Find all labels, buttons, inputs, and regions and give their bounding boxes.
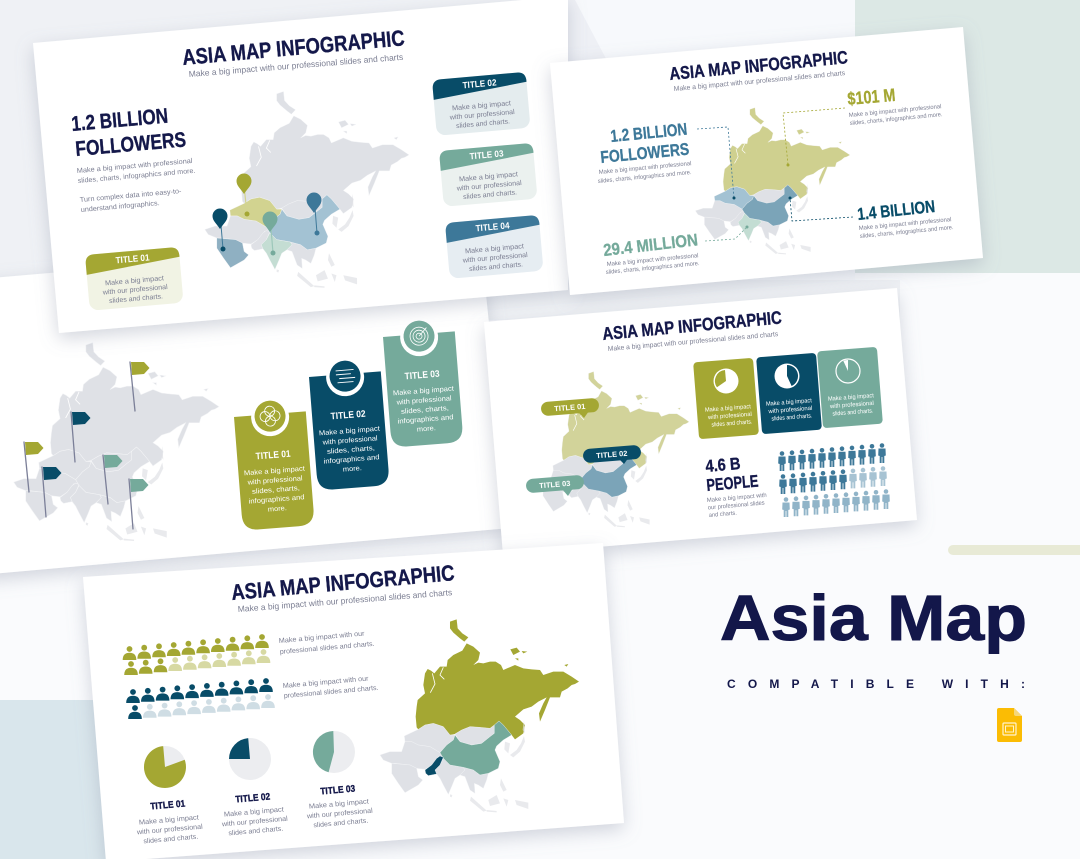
card: title 02 [432, 72, 531, 136]
body text: Make a big impact with professional [77, 158, 193, 175]
box: green pie [817, 347, 883, 428]
panel: slide 5 pictograms and pies [83, 543, 624, 859]
stat: 1.4 billion [856, 197, 954, 240]
slide 4 subtitle: Make a big impact with our professional slides and charts [608, 331, 779, 353]
box: olive pie: slides and charts. [711, 419, 753, 429]
box: olive pie: Make a big impact [705, 404, 751, 414]
card: title 03: with professional [395, 395, 452, 407]
pie: title 03: slides and charts. [313, 818, 369, 829]
card: title 02: more. [343, 465, 362, 474]
stat: $101 M: $101 M [847, 85, 896, 109]
body text: understand infographics. [81, 200, 160, 214]
pie: title 01: slides and charts. [143, 834, 199, 845]
slide 4 title: ASIA MAP INFOGRAPHIC [602, 307, 783, 344]
stat: 1.2 billion followers [598, 120, 692, 185]
headline: 1.2 billion followers [70, 105, 187, 161]
slide 5 subtitle: Make a big impact with our professional slides and charts [237, 587, 452, 614]
pie: title 01: with our professional [136, 824, 204, 836]
card: title 03: slides and charts. [463, 189, 517, 201]
card: title 01: Make a big impact [244, 466, 305, 477]
card: title 03: TITLE 03 [469, 148, 504, 161]
stat: 4.6 B people: 4.6 B [705, 454, 741, 476]
stat: 4.6 B people: and charts. [709, 511, 737, 519]
pie: title 03: Make a big impact [309, 798, 369, 811]
body text: slides, charts, infographics and more. [78, 168, 196, 185]
main title: Asia Map [720, 582, 1027, 654]
box: green pie: slides and charts. [832, 408, 874, 418]
callout: title 03 [526, 475, 584, 496]
card: title 03: infographics and [397, 414, 454, 426]
card: title 02: with professional [321, 435, 378, 447]
pie: title 02: slides and charts. [228, 826, 284, 837]
card: title 01: infographics and [248, 494, 305, 506]
stat: $101 M: Make a big impact with professional [849, 104, 942, 119]
map pins [212, 174, 322, 256]
card: title 02 [308, 355, 390, 491]
slide 2 title: ASIA MAP INFOGRAPHIC [668, 47, 849, 84]
icon: Google Slides file [997, 708, 1022, 742]
card: title 03: with our professional [456, 180, 522, 193]
slide 2 subtitle: Make a big impact with our professional slides and charts [674, 70, 846, 93]
card: title 01: TITLE 01 [115, 252, 150, 265]
card: title 02: slides and charts. [456, 118, 510, 130]
people rows olive [123, 634, 270, 675]
stat: 1.2 billion followers: 1.2 BILLION [610, 120, 688, 146]
panel: slide 4 pie boxes and people [484, 288, 917, 555]
pie: title 01 [136, 746, 204, 845]
card: title 02: Make a big impact [319, 426, 380, 437]
stat: 1.2 billion followers: Make a big impact with professional [599, 161, 692, 176]
slide 1 subtitle: Make a big impact with our professional slides and charts [188, 52, 403, 79]
callout: title 03: TITLE 03 [539, 479, 571, 490]
body text [77, 158, 196, 214]
card: title 01: with our professional [102, 284, 168, 297]
box: olive pie: with professional [707, 412, 752, 421]
box: dark pie: slides and charts. [771, 413, 813, 423]
pie: title 03: TITLE 03 [320, 784, 356, 798]
map: Russia and China highlighted [534, 372, 689, 527]
card: title 03 [439, 143, 538, 207]
box: green pie: with professional [829, 401, 874, 410]
card: title 02: with our professional [449, 109, 515, 122]
pie: title 02 [221, 738, 289, 837]
stat: 1.2 billion followers: slides, charts, infographics and more. [598, 170, 692, 185]
map: gray Asia with flags [14, 343, 219, 541]
panel: slide 2 statistics map [550, 27, 983, 295]
card: title 03: Make a big impact [393, 386, 454, 397]
card: title 01: Make a big impact [105, 275, 164, 287]
headline: 1.2 billion followers: FOLLOWERS [74, 128, 187, 161]
stat: 29.4 million: slides, charts, infographics and more. [606, 261, 700, 276]
card: title 01 [85, 247, 184, 311]
stat: 1.4 billion: 1.4 BILLION [856, 197, 936, 224]
stat: $101 M [847, 85, 943, 127]
subtitle: compatible with: COMPATIBLE WITH: [727, 677, 1025, 691]
pie: title 01: TITLE 01 [150, 798, 186, 813]
card: title 03: TITLE 03 [404, 369, 440, 382]
callout: title 02: TITLE 02 [596, 449, 628, 460]
callout: title 02 [583, 445, 641, 464]
stat: 4.6 B people: our professional slides [708, 501, 765, 511]
box: olive pie [693, 358, 759, 439]
callout: title 01 [541, 398, 599, 418]
card: title 01: slides and charts. [109, 293, 163, 305]
card: title 02: Make a big impact [452, 100, 511, 112]
pictogram captions: professional slides and charts. [280, 641, 375, 656]
box: green pie: Make a big impact [828, 393, 874, 403]
card: title 03: more. [417, 425, 436, 434]
pie: title 03: with our professional [306, 808, 374, 820]
map: Asia with highlighted countries [205, 91, 409, 288]
map: Russia, China, Kazakhstan, India highlighted [695, 108, 850, 254]
accent bar [948, 545, 1080, 555]
card: title 03 [382, 315, 463, 448]
dashed connectors [697, 108, 853, 241]
pie: title 02: Make a big impact [224, 806, 284, 819]
stat: 4.6 B people: PEOPLE [706, 472, 759, 495]
people pictogram [778, 443, 890, 517]
pictogram captions: Make a big impact with our [279, 630, 366, 645]
people rows dark [126, 678, 275, 719]
card: title 03: slides, charts, [401, 405, 449, 416]
card: title 02: TITLE 02 [462, 77, 497, 90]
headline: 1.2 billion followers: 1.2 BILLION [70, 105, 169, 136]
stat: 4.6 B people [705, 454, 767, 519]
card: title 02: slides, charts, [327, 445, 375, 456]
stat: 29.4 million: 29.4 MILLION [602, 230, 699, 260]
box: dark pie: with professional [767, 406, 813, 415]
body text: Turn complex data into easy-to- [80, 188, 182, 204]
card: title 04: with our professional [462, 252, 528, 265]
slide 1 title: ASIA MAP INFOGRAPHIC [181, 25, 406, 70]
box: dark pie: Make a big impact [766, 398, 812, 408]
callout: title 01: TITLE 01 [554, 402, 586, 413]
card: title 01: TITLE 01 [255, 449, 292, 462]
card: title 01 [233, 395, 315, 531]
panel: slide 3 flags and cards [0, 236, 510, 575]
stat: $101 M: slides, charts, infographics and more. [850, 112, 943, 127]
box: dark pie [756, 353, 822, 434]
stat: 29.4 million: Make a big impact with professional [607, 253, 699, 268]
panel: slide 1 pins and titled cards [33, 0, 568, 333]
pie: title 02: with our professional [221, 816, 289, 828]
stat: 4.6 B people: Make a big impact with [707, 493, 767, 504]
pie: title 03 [306, 731, 374, 829]
map: Russia, China, Pakistan highlighted [380, 619, 579, 812]
card: title 01: with professional [246, 475, 303, 487]
card: title 04: slides and charts. [469, 261, 523, 273]
pie: title 01: Make a big impact [139, 814, 199, 827]
pictogram captions: professional slides and charts. [284, 685, 379, 700]
slide 5 title: ASIA MAP INFOGRAPHIC [230, 560, 456, 605]
card: title 04: Make a big impact [465, 243, 524, 255]
card: title 04 [445, 215, 544, 279]
stat: 1.4 billion: slides, charts, infographics and more. [860, 225, 954, 240]
pie: title 02: TITLE 02 [235, 792, 271, 806]
card: title 03: Make a big impact [459, 171, 518, 183]
pictogram captions [279, 630, 379, 700]
stat: 29.4 million [602, 230, 700, 276]
stat: 1.4 billion: Make a big impact with professional [859, 217, 952, 232]
card: title 02: TITLE 02 [330, 409, 366, 422]
card: title 02: infographics and [323, 454, 380, 466]
card: title 01: more. [268, 505, 287, 514]
card: title 04: TITLE 04 [475, 220, 510, 233]
pictogram captions: Make a big impact with our [283, 675, 370, 690]
card: title 01: slides, charts, [252, 485, 300, 496]
stat: 1.2 billion followers: FOLLOWERS [600, 140, 690, 167]
flags [24, 362, 150, 529]
